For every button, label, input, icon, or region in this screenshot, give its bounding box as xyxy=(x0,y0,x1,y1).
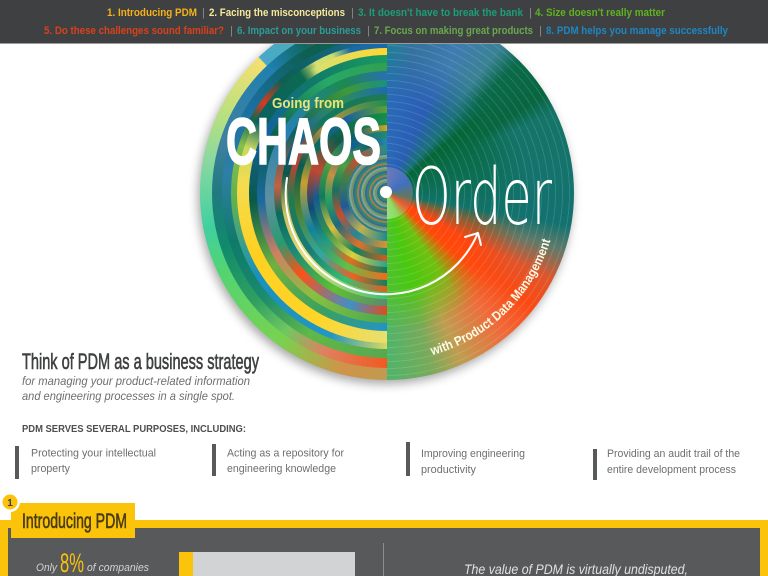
purpose 3: Improving engineering xyxy=(421,448,525,460)
navigation row 2: | xyxy=(367,25,370,37)
purpose 1: Protecting your intellectual xyxy=(31,448,156,460)
navigation row 2: | xyxy=(539,25,542,37)
navigation row 2: 8. PDM helps you manage successfully xyxy=(546,25,729,37)
curved caption: with product data management: with Product Data Management xyxy=(430,238,550,355)
bar chart: 8 percent xyxy=(179,552,355,576)
icon: curved arrow xyxy=(286,178,481,294)
navigation row 1: 3. It doesn't have to break the bank xyxy=(358,7,524,19)
purpose 2: Acting as a repository for xyxy=(227,448,344,460)
purpose 3: productivity xyxy=(421,464,476,476)
purpose 4: Providing an audit trail of the xyxy=(607,448,740,460)
tab: introducing PDM: Introducing PDM xyxy=(22,510,127,533)
navigation row 1: | xyxy=(529,7,532,19)
navigation row 2: 6. Impact on your business xyxy=(237,25,361,37)
navigation row 2: 7. Focus on making great products xyxy=(374,25,533,37)
navigation row 1 xyxy=(107,7,666,19)
chaos to order disc xyxy=(192,44,578,390)
stat: 8 percent of companies xyxy=(36,548,149,576)
navigation row 1: | xyxy=(351,7,354,19)
purpose 4: entire development process xyxy=(607,464,736,476)
heading: chaos: CHAOS xyxy=(226,104,381,178)
icon: centre dot xyxy=(380,186,392,198)
subtitle: and engineering processes in a single spot. xyxy=(22,389,235,403)
panel: introducing PDM xyxy=(0,492,768,576)
title: think of PDM: Think of PDM as a business strategy xyxy=(22,349,259,374)
navigation row 2: | xyxy=(230,25,233,37)
badge: section number xyxy=(0,492,20,512)
stat: 8 percent of companies: Only xyxy=(36,562,58,574)
navigation row 1: | xyxy=(202,7,205,19)
navigation row 1: 4. Size doesn't really matter xyxy=(535,7,666,19)
navigation row 1: 2. Facing the misconceptions xyxy=(209,7,345,19)
purpose 2 xyxy=(212,444,344,476)
heading: order: Order xyxy=(412,153,552,243)
subtitle xyxy=(22,374,250,403)
purpose 4 xyxy=(593,448,740,480)
tab: introducing PDM xyxy=(11,503,135,538)
navigation row 2 xyxy=(44,25,729,37)
navigation row 2: 5. Do these challenges sound familiar? xyxy=(44,25,224,37)
badge: section number: 1 xyxy=(7,498,13,509)
heading: going from: Going from xyxy=(272,95,344,112)
stat: 8 percent of companies: of companies xyxy=(87,562,149,574)
purposes heading: PDM SERVES SEVERAL PURPOSES, INCLUDING: xyxy=(22,423,246,435)
purpose 1: property xyxy=(31,463,70,475)
purpose 2: engineering knowledge xyxy=(227,463,336,475)
subtitle: for managing your product-related information xyxy=(22,374,250,388)
navigation row 1: 1. Introducing PDM xyxy=(107,7,197,19)
header navigation xyxy=(0,0,768,44)
purpose 3 xyxy=(406,442,525,476)
purpose 1 xyxy=(15,446,156,479)
